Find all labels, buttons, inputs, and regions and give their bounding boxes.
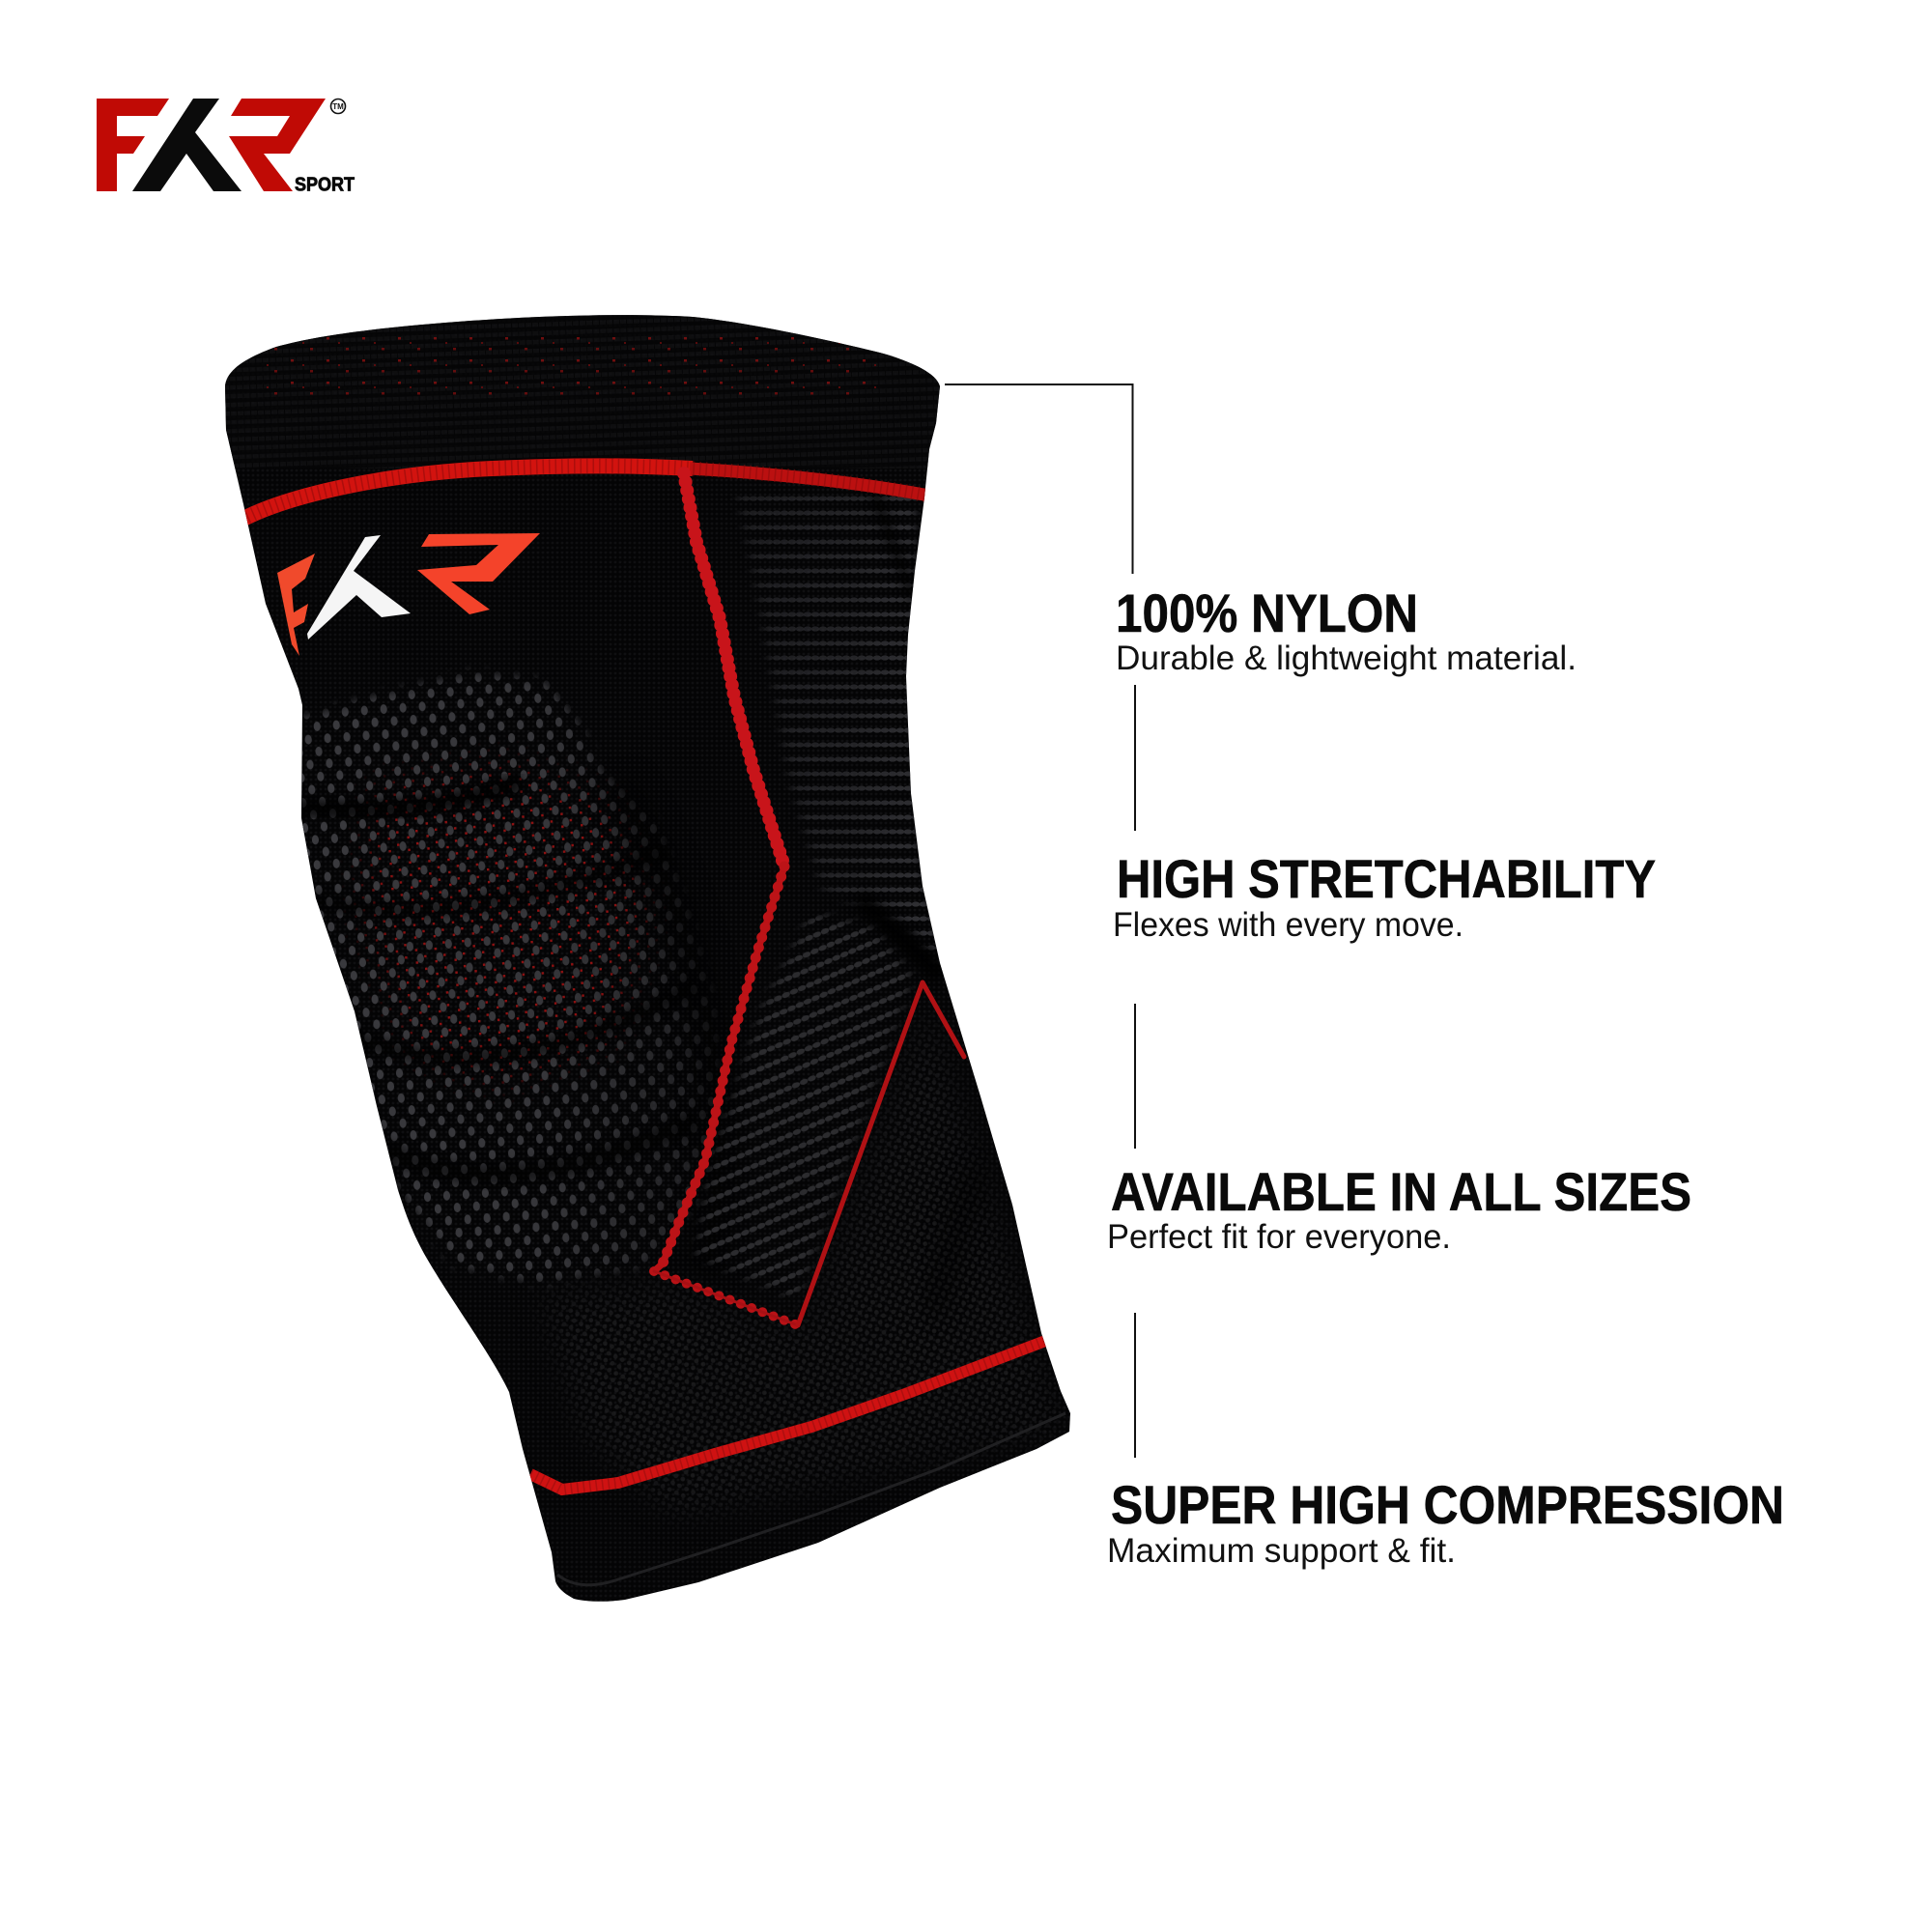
top red band [242,466,929,520]
logo letter R [229,99,326,191]
knee mesh panel [301,668,715,1289]
woven sleeve logo [277,533,540,656]
diagonal striped side panel [694,912,914,1297]
top cuff ribbing [213,309,947,469]
description: Flexes with every move. [1113,906,1463,944]
heading: 100% NYLON [1116,582,1418,643]
logo: FXR Sport [97,99,355,195]
connector line from sleeve to first feature [945,384,1132,574]
connector line 3 [1134,1004,1136,1149]
zigzag red seam [654,473,964,1325]
heading: AVAILABLE IN ALL SIZES [1111,1161,1691,1222]
heading: HIGH STRETCHABILITY [1117,848,1656,909]
description: Durable & lightweight material. [1116,639,1577,677]
product photo: knee compression sleeve [213,309,1101,1613]
sleeve logo F [277,554,315,656]
logo word SPORT: SPORT [295,174,355,195]
connector line 2 [1134,685,1136,831]
sleeve logo R [417,533,540,614]
description: Maximum support & fit. [1107,1532,1456,1570]
feature: high stretchability [1113,848,1656,944]
dark shadow wedges [860,493,976,1314]
bottom hem [557,1413,1065,1585]
bottom red band [530,1340,1048,1490]
feature: super high compression [1107,1474,1784,1570]
description: Perfect fit for everyone. [1107,1218,1451,1256]
lower fine knit [547,1032,1057,1515]
trademark mark: TM [332,102,344,111]
sleeve body [213,309,1101,1613]
feature: available in all sizes [1107,1161,1691,1256]
connector line 4 [1134,1313,1136,1458]
sleeve logo K [307,535,411,639]
logo letter F [97,99,169,191]
logo letter K [132,99,242,191]
feature: 100% nylon [1116,582,1577,677]
heading: SUPER HIGH COMPRESSION [1111,1474,1784,1535]
upper striped side panel [736,497,939,960]
trademark mark [330,99,346,114]
